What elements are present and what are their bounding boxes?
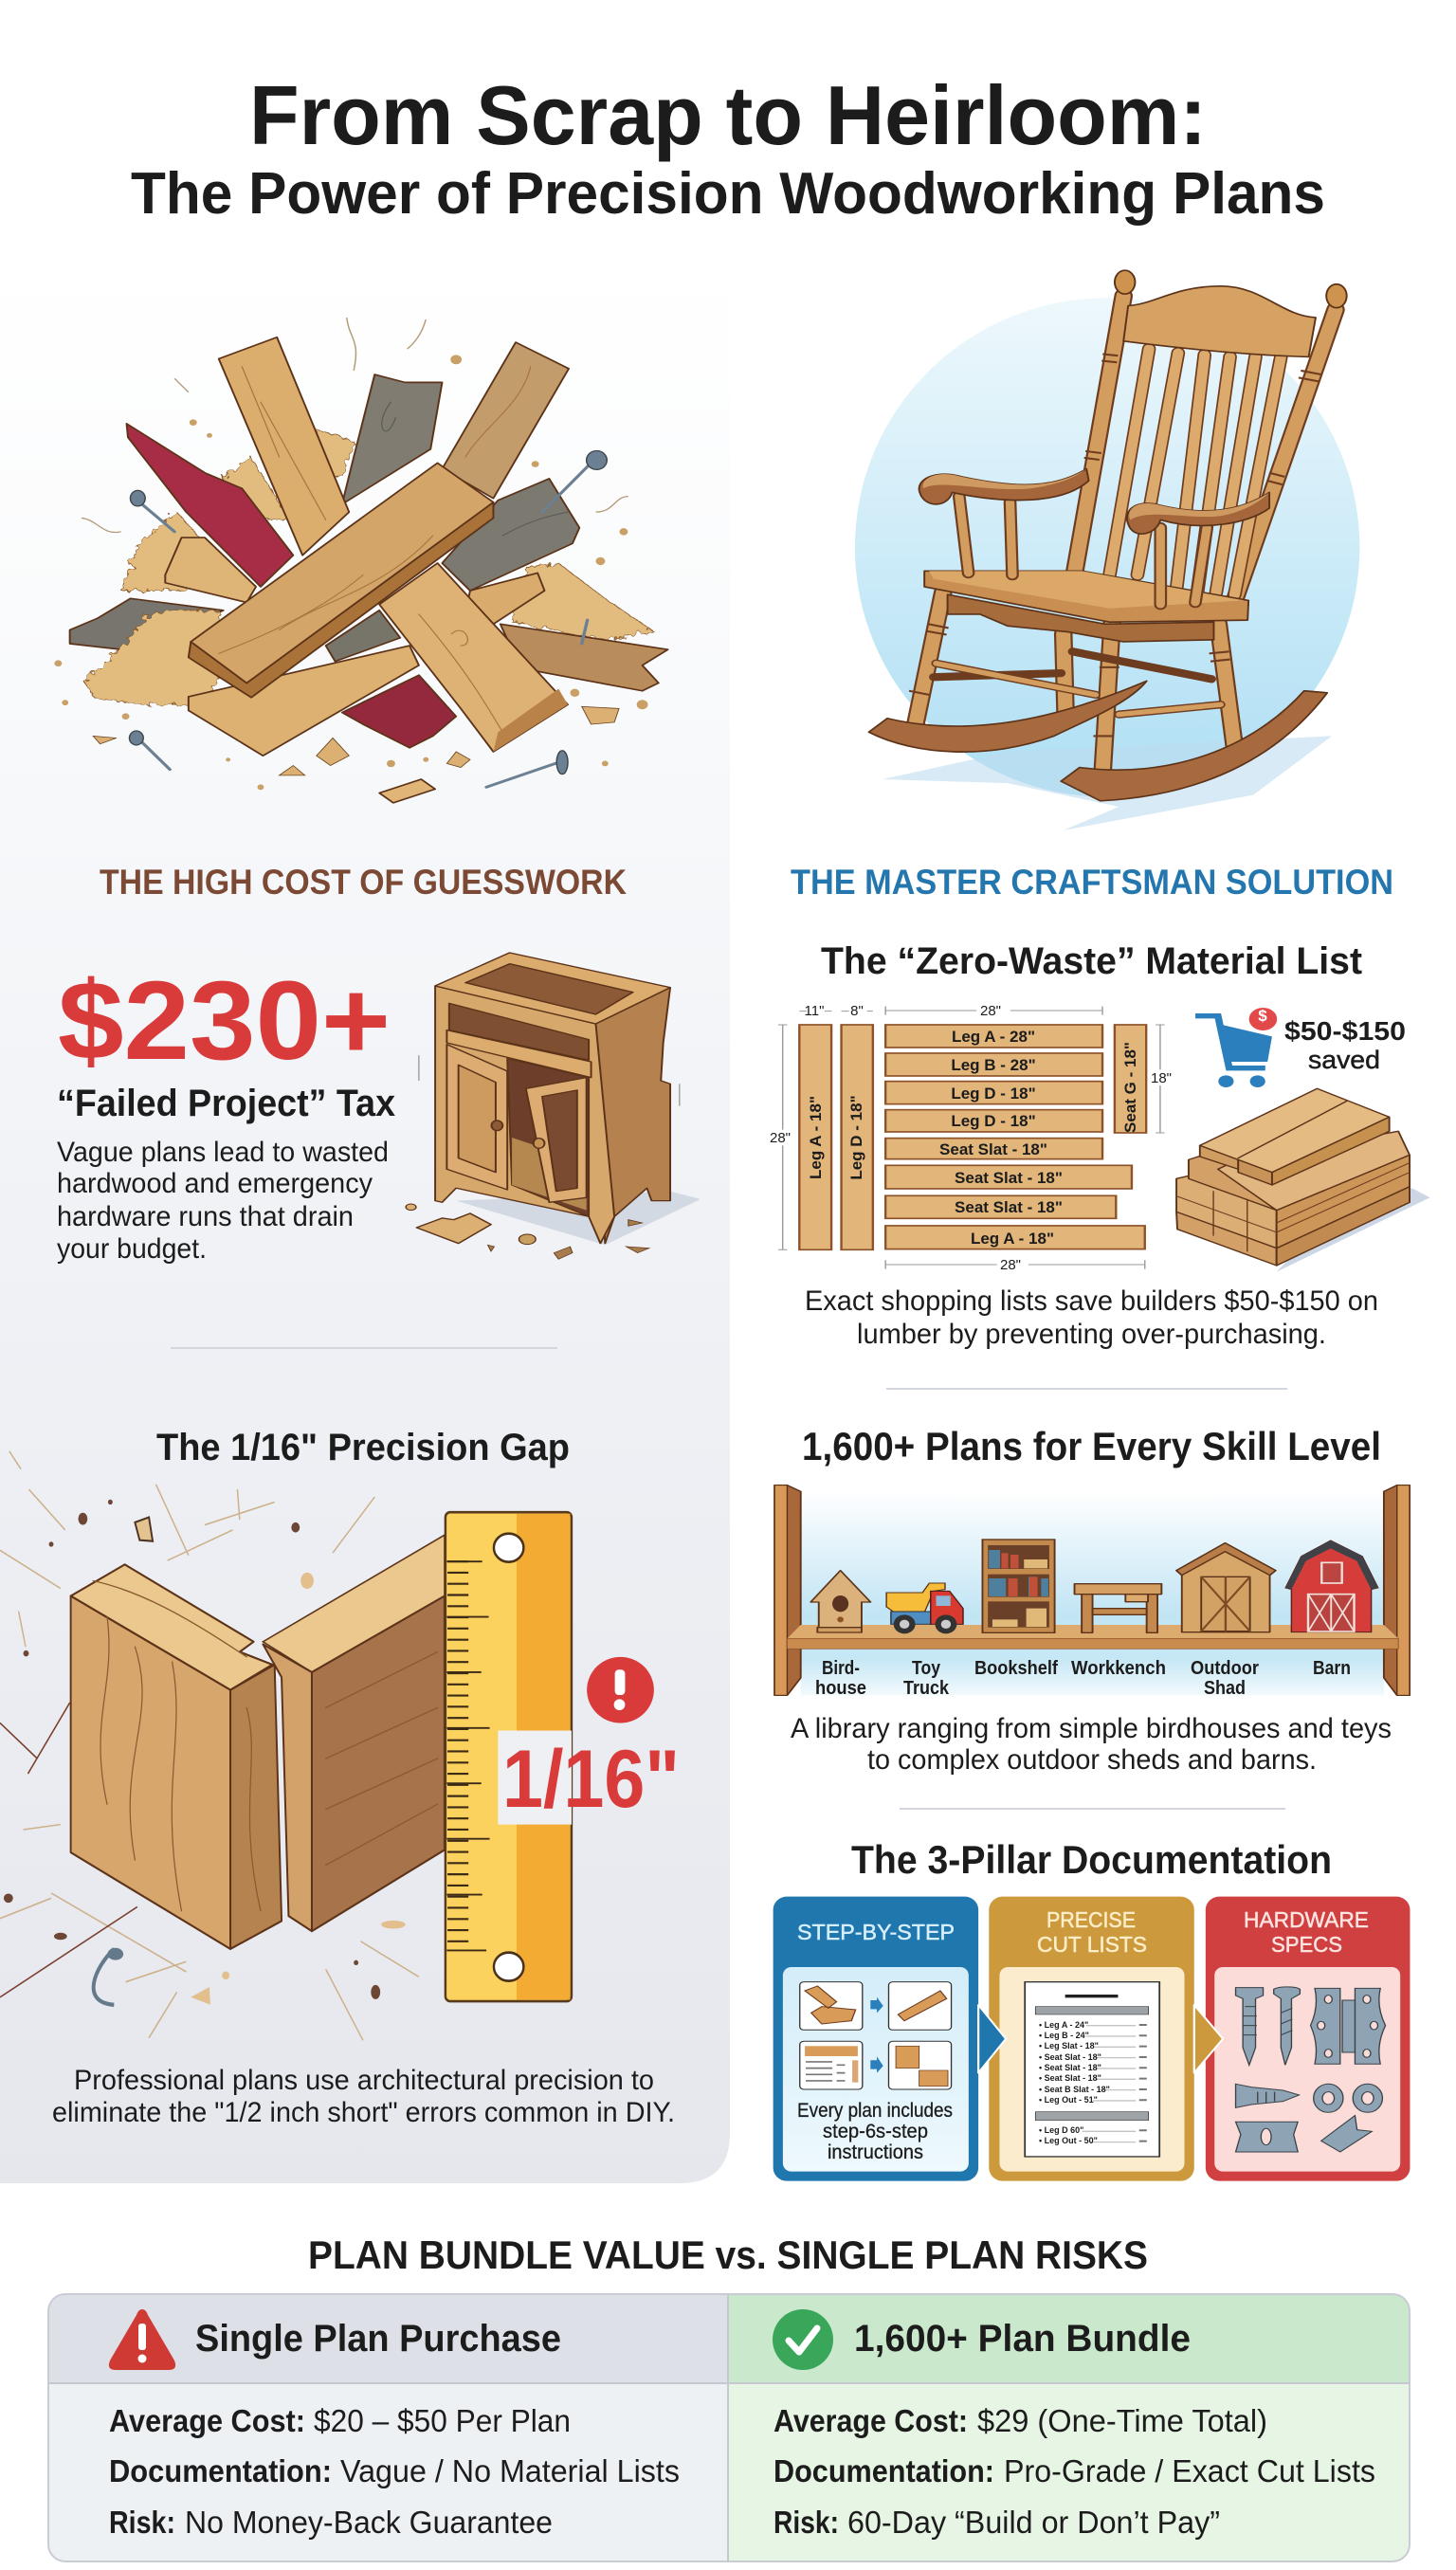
heading: plans: 1,600+ Plans for Every Skill Level <box>802 1424 1381 1468</box>
single plan rows: Documentation: <box>109 2453 332 2488</box>
diagram: material cut list: 8" <box>850 1003 864 1019</box>
shelf labels: Workkench <box>1071 1658 1166 1679</box>
panel: step-by-step <box>774 1897 978 2181</box>
bundle rows: Average Cost: <box>774 2403 968 2438</box>
item: birdhouse <box>810 1571 870 1632</box>
diagram: material cut list: 28" <box>1000 1257 1021 1273</box>
shelf labels: Shad <box>1204 1678 1246 1699</box>
panel: precise cut lists: • Leg Out - 51" <box>1039 2095 1098 2105</box>
illustration: plan shelf <box>774 1485 1410 1699</box>
illustration: broken cabinet <box>406 953 701 1259</box>
single plan rows: No Money-Back Guarantee <box>185 2505 553 2540</box>
comparison table: 1,600+ Plan Bundle <box>854 2318 1191 2360</box>
heading: precision gap: The 1/16" Precision Gap <box>156 1427 570 1468</box>
diagram: material cut list: 11" <box>805 1003 824 1019</box>
panel: precise cut lists: • Seat B Slat - 18" <box>1039 2085 1110 2094</box>
icon: warning triangle <box>109 2309 175 2370</box>
text block: zero-waste description: lumber by preventing over-purchasing. <box>857 1319 1326 1350</box>
illustration: wood joint with ruler <box>0 1451 654 2040</box>
heading: solution: THE MASTER CRAFTSMAN SOLUTION <box>791 863 1393 902</box>
text block: plans description: A library ranging from simple birdhouses and teys <box>791 1713 1392 1744</box>
diagram: material cut list: Leg D - 18" <box>951 1112 1036 1130</box>
comparison table <box>48 2294 1410 2561</box>
illustration: rocking chair <box>855 270 1359 830</box>
diagram: material cut list: 18" <box>1151 1070 1172 1086</box>
heading: comparison: PLAN BUNDLE VALUE vs. SINGLE PLAN RISKS <box>308 2233 1148 2277</box>
diagram: material cut list: 28" <box>980 1003 1001 1019</box>
text block: precision description <box>52 2065 675 2128</box>
single plan rows: $20 – $50 Per Plan <box>314 2403 571 2438</box>
arrow: step-by-step to cut lists <box>978 2005 1006 2073</box>
panel: step-by-step: STEP-BY-STEP <box>797 1920 955 1944</box>
title <box>131 68 1325 227</box>
title: From Scrap to Heirloom: <box>249 68 1207 162</box>
panel: left background <box>0 265 730 2183</box>
single plan rows <box>109 2403 680 2540</box>
callout: 1/16 inch: 1/16" <box>502 1734 680 1825</box>
panel: step-by-step: step-6s-step <box>823 2121 928 2142</box>
panel: step-by-step: Every plan includes <box>797 2100 953 2122</box>
item: bookshelf <box>982 1540 1055 1632</box>
diagram: material cut list: Seat Slat - 18" <box>955 1169 1063 1187</box>
panel: precise cut lists: • Leg B - 24" <box>1039 2031 1089 2040</box>
stat: failed project tax <box>57 958 395 1265</box>
bundle rows: Documentation: <box>774 2453 994 2488</box>
bundle rows: Risk: <box>774 2505 839 2540</box>
illustration: pile of scrap wood <box>54 318 668 803</box>
stat: failed project tax: “Failed Project” Tax <box>57 1083 395 1124</box>
shelf labels: Truck <box>903 1678 950 1699</box>
panel: precise cut lists: • Leg D 60" <box>1039 2125 1083 2135</box>
bundle rows: $29 (One-Time Total) <box>977 2403 1267 2438</box>
shelf labels: house <box>815 1678 866 1699</box>
diagram: material cut list: Leg A - 18" <box>971 1230 1054 1248</box>
diagram: material cut list: Leg B - 28" <box>951 1056 1036 1074</box>
panel: precise cut lists: • Seat Slat - 18" <box>1039 2073 1101 2083</box>
stat: savings <box>1284 1016 1406 1074</box>
text block: zero-waste description <box>805 1285 1378 1350</box>
divider pillars <box>900 1808 1285 1810</box>
stat: failed project tax: hardware runs that drain <box>57 1201 354 1232</box>
panel: precise cut lists: • Seat Slat - 18" <box>1039 2063 1101 2072</box>
shelf labels: Bird- <box>822 1658 860 1679</box>
icon: check circle <box>773 2309 833 2370</box>
heading: zero-waste: The “Zero-Waste” Material List <box>821 940 1362 982</box>
stat: failed project tax: hardwood and emergency <box>57 1168 373 1199</box>
diagram: material cut list: 28" <box>770 1130 791 1146</box>
step thumbnails <box>800 1982 952 2089</box>
panel: hardware specs: SPECS <box>1271 1932 1342 1957</box>
stat: savings: $50-$150 <box>1284 1016 1406 1046</box>
stat: failed project tax: your budget. <box>57 1233 207 1265</box>
panel: hardware specs <box>1206 1897 1410 2181</box>
single plan rows: Vague / No Material Lists <box>340 2453 680 2488</box>
stat: failed project tax: Vague plans lead to wasted <box>57 1137 389 1168</box>
comparison table: Single Plan Purchase <box>195 2318 561 2360</box>
shelf labels <box>815 1658 1351 1699</box>
panel: precise cut lists: • Leg A - 24" <box>1039 2020 1088 2030</box>
panel: hardware specs: HARDWARE <box>1244 1907 1369 1932</box>
diagram: material cut list: Leg D - 18" <box>951 1085 1036 1103</box>
panel: precise cut lists: CUT LISTS <box>1037 1932 1147 1957</box>
diagram: material cut list: Leg D - 18" <box>847 1095 865 1180</box>
divider left <box>171 1347 557 1349</box>
diagram: material cut list: Leg A - 28" <box>952 1028 1035 1046</box>
diagram: material cut list: Seat Slat - 18" <box>939 1140 1047 1158</box>
diagram: material cut list: Seat Slat - 18" <box>955 1198 1063 1216</box>
shelf labels: Bookshelf <box>974 1658 1058 1679</box>
bundle rows: 60-Day “Build or Don’t Pay” <box>847 2505 1220 2540</box>
item: toy truck <box>886 1583 963 1633</box>
diagram: material cut list: Seat G - 18" <box>1121 1042 1139 1133</box>
stat: savings: saved <box>1308 1046 1380 1074</box>
infographic canvas: $ <box>1258 1007 1267 1025</box>
heading: 3 pillars: The 3-Pillar Documentation <box>851 1837 1332 1882</box>
shelf labels: Barn <box>1313 1658 1351 1679</box>
text block: plans description: to complex outdoor sheds and barns. <box>867 1744 1317 1776</box>
panel: precise cut lists: • Seat Slat - 18" <box>1039 2052 1101 2062</box>
item: outdoor shed <box>1176 1543 1276 1632</box>
text block: precision description: eliminate the "1/2 inch short" errors common in DIY. <box>52 2097 675 2128</box>
stat: failed project tax: $230+ <box>58 958 391 1084</box>
chair frame <box>869 270 1347 801</box>
panel: step-by-step: instructions <box>828 2142 923 2163</box>
panel: precise cut lists: PRECISE <box>1046 1907 1136 1932</box>
floor shadow <box>883 736 1332 830</box>
arrow: cut lists to hardware <box>1194 2005 1223 2073</box>
text block: zero-waste description: Exact shopping lists save builders $50-$150 on <box>805 1285 1378 1317</box>
panel: precise cut lists: • Leg Slat - 18" <box>1039 2041 1099 2051</box>
bundle rows <box>774 2403 1375 2540</box>
illustration: lumber stack <box>1176 1088 1429 1272</box>
text block: precision description: Professional plans use architectural precision to <box>74 2065 654 2096</box>
item: workbench <box>1075 1584 1161 1632</box>
single plan rows: Risk: <box>109 2505 175 2540</box>
single plan rows: Average Cost: <box>109 2403 305 2438</box>
title: The Power of Precision Woodworking Plans <box>131 161 1325 227</box>
bundle rows: Pro-Grade / Exact Cut Lists <box>1004 2453 1375 2488</box>
icon: shopping cart <box>1195 1007 1278 1087</box>
text block: plans description <box>791 1713 1392 1776</box>
shelf labels: Toy <box>912 1658 941 1679</box>
panel: precise cut lists: • Leg Out - 50" <box>1039 2136 1098 2145</box>
item: barn <box>1285 1540 1378 1632</box>
heading: guesswork: THE HIGH COST OF GUESSWORK <box>100 863 627 902</box>
panel: precise cut lists <box>989 1897 1194 2181</box>
divider right <box>886 1388 1287 1390</box>
shelf labels: Outdoor <box>1191 1658 1259 1679</box>
blue circle background <box>855 298 1359 797</box>
diagram: material cut list: Leg A - 18" <box>807 1096 825 1179</box>
diagram: material cut list <box>769 1003 1173 1273</box>
